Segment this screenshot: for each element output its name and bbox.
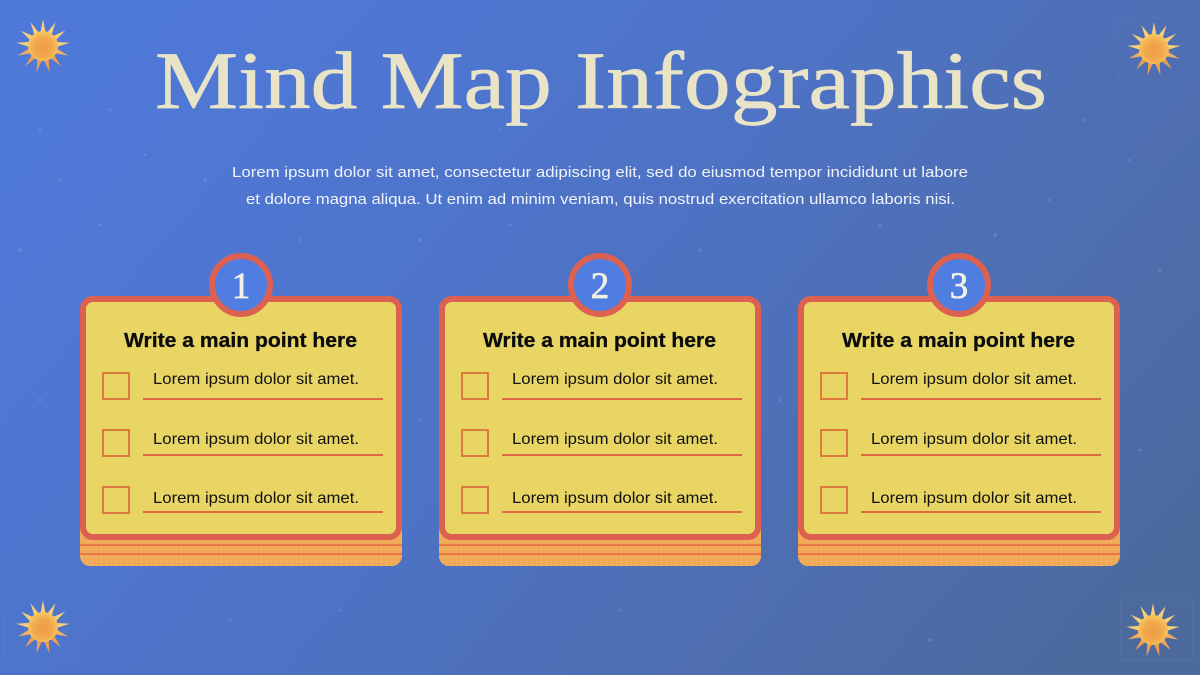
checklist item 1: Lorem ipsum dolor sit amet. (512, 371, 718, 388)
checklist item 2 (462, 430, 742, 456)
checklist item 2: Lorem ipsum dolor sit amet. (512, 431, 718, 448)
paper stack (798, 520, 1120, 566)
checklist item 3: Lorem ipsum dolor sit amet. (871, 490, 1077, 507)
panel: card 2 (439, 256, 761, 566)
checklist item 1 (103, 371, 383, 400)
card body (442, 299, 758, 537)
checklist item 2 (821, 430, 1101, 456)
number badge: 3 (950, 266, 968, 307)
checklist item 2: Lorem ipsum dolor sit amet. (153, 431, 359, 448)
checklist item 1: Lorem ipsum dolor sit amet. (871, 371, 1077, 388)
intro text: Lorem ipsum dolor sit amet, consectetur adipiscing elit, sed do eiusmod tempor incididunt ut labore (232, 164, 968, 181)
paper stack (439, 520, 761, 566)
checklist item 1 (821, 371, 1101, 400)
number badge: 2 (591, 266, 609, 307)
card heading: Write a main point here (124, 330, 357, 352)
icon: sun bottom right (1126, 603, 1180, 657)
icon: sun bottom left (16, 600, 70, 654)
icon: sun top right (1127, 22, 1181, 76)
background speckles (18, 109, 1162, 642)
number badge (930, 256, 988, 314)
number badge (571, 256, 629, 314)
checklist item 3 (103, 487, 383, 513)
checklist item 1: Lorem ipsum dolor sit amet. (153, 371, 359, 388)
checklist item 2: Lorem ipsum dolor sit amet. (871, 431, 1077, 448)
intro text: et dolore magna aliqua. Ut enim ad minim veniam, quis nostrud exercitation ullamco laboris nisi. (246, 191, 955, 208)
checklist item 3 (821, 487, 1101, 513)
card heading: Write a main point here (483, 330, 716, 352)
checklist item 3: Lorem ipsum dolor sit amet. (153, 490, 359, 507)
number badge: 1 (232, 266, 250, 307)
intro text (232, 164, 968, 208)
panel: card 3 (798, 256, 1120, 566)
checklist item 3 (462, 487, 742, 513)
number badge (212, 256, 270, 314)
card heading: Write a main point here (842, 330, 1075, 352)
checklist item 1 (462, 371, 742, 400)
card body (83, 299, 399, 537)
card body (801, 299, 1117, 537)
icon: sun top left (16, 19, 70, 73)
title: Mind Map Infographics (155, 35, 1047, 126)
paper stack (80, 520, 402, 566)
panel: card 1 (80, 256, 402, 566)
checklist item 2 (103, 430, 383, 456)
checklist item 3: Lorem ipsum dolor sit amet. (512, 490, 718, 507)
